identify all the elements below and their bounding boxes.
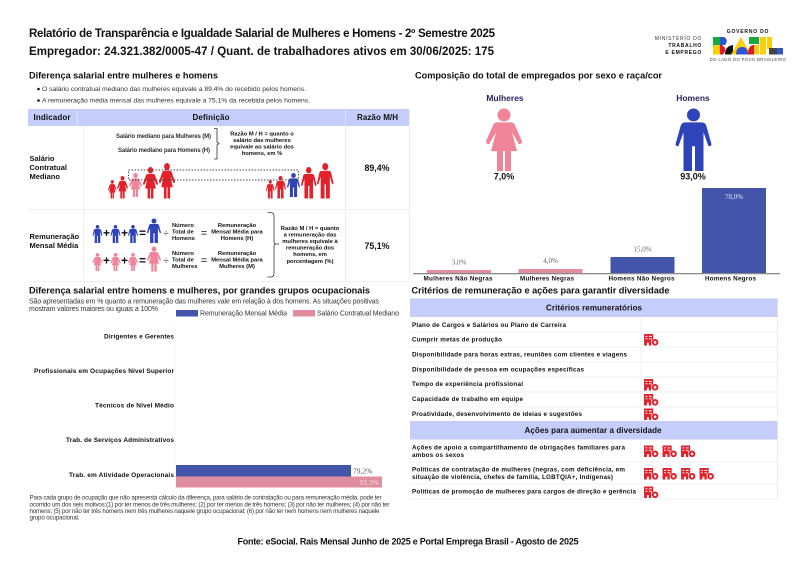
icon: women group <box>108 163 175 198</box>
icon: homens <box>676 93 712 182</box>
formula note: salário das mulheres <box>233 138 291 144</box>
bar chart: raça/cor: 15,0% <box>633 246 652 254</box>
formula: women: Mensal Média para <box>211 258 264 264</box>
row: salário contratual mediano: Salário <box>30 154 55 163</box>
formula note: mulheres equivale à <box>282 239 338 245</box>
logo: ministério: MINISTÉRIO DO <box>655 35 702 42</box>
formula: men: Total de <box>172 230 195 236</box>
formula note: homens, em <box>293 252 327 258</box>
icon: homens: 93,0% <box>680 172 706 182</box>
logo: ministério: TRABALHO <box>668 43 702 49</box>
formula note: Razão M / H = quanto o <box>230 132 294 138</box>
formula: women: + <box>121 254 128 268</box>
bracket <box>214 128 219 159</box>
table header: Definição <box>192 113 230 122</box>
category labels: Trab. em Atividade Operacionais <box>69 472 174 479</box>
logo: governo do Brasil <box>710 29 787 62</box>
formula: men: + <box>121 226 128 240</box>
description: São apresentadas em % quanto a remuneração das mulheres vale em relação à dos homens. As situações positivas <box>29 298 380 306</box>
row: remuneração mensal média: Mensal Média <box>30 241 79 250</box>
header: critérios remuneratórios: Critérios remuneratórios <box>546 304 643 312</box>
bar chart: raça/cor: Mulheres Não Negras <box>424 276 493 282</box>
panel: composição <box>413 70 780 282</box>
logo: ministério <box>655 35 702 56</box>
formula note: homens, em % <box>242 151 282 157</box>
row: salário contratual mediano <box>30 128 390 198</box>
legend <box>176 310 399 318</box>
icon: homens: Homens <box>676 93 710 103</box>
heading: diferença salarial: Diferença salarial entre mulheres e homens <box>29 70 218 80</box>
bar chart: raça/cor: 3,0% <box>452 258 466 266</box>
bar chart: ocupações: 79,2% <box>353 466 372 476</box>
bullet list <box>37 86 310 104</box>
value: 89,4%: 89,4% <box>365 163 390 173</box>
title <box>29 28 496 58</box>
criteria rows: Disponibilidade para horas extras, reuniões com clientes e viagens <box>412 352 627 358</box>
category labels: Profissionais em Ocupações Nível Superior <box>34 368 174 375</box>
actions rows: Políticas de promoção de mulheres para cargos de direção e gerência <box>412 488 636 496</box>
criteria rows: Proatividade, desenvolvimento de ideias e sugestões <box>412 411 582 418</box>
icon: mulheres: Mulheres <box>486 93 524 103</box>
category labels: Dirigentes e Gerentes <box>104 334 174 340</box>
formula: women: Número <box>172 251 194 257</box>
formula note: remuneração dos <box>286 246 334 252</box>
table header: Razão M/H <box>357 113 398 122</box>
row: salário contratual mediano: Mediano <box>30 172 60 181</box>
footnote: Para cada grupo de ocupação que não apresenta cálculo da diferença, para salário de contratação ou para remuneração média, pode ter <box>30 494 382 502</box>
icons: ações <box>644 446 713 498</box>
row: salário contratual mediano: Salário mediano para Mulheres (M) <box>116 134 211 140</box>
formula: women: Mulheres <box>172 264 197 270</box>
category labels <box>34 334 174 479</box>
criteria rows: Tempo de experiência profissional <box>412 381 523 388</box>
formula: men: Mensal Média para <box>211 230 264 236</box>
actions rows: Políticas de contratação de mulheres (negras, com deficiência, em <box>412 466 625 474</box>
bar chart: ocupações: 93,3% <box>360 478 379 487</box>
category labels: Trab. de Serviços Administrativos <box>66 437 174 444</box>
criteria rows: Cumprir metas de produção <box>412 336 502 344</box>
bar chart: raça/cor: Homens Não Negros <box>608 276 675 282</box>
formula: women: Total de <box>172 258 195 264</box>
actions rows: situação de violência, chefes de família, LGBTQIA+, Indígenas) <box>412 474 613 481</box>
formula: men: + <box>103 226 110 240</box>
actions rows: Ações de apoio a compartilhamento de obrigações familiares para <box>412 444 625 452</box>
icon: mulheres <box>486 93 524 182</box>
formula: women: + <box>103 254 110 268</box>
bar chart: raça/cor <box>413 188 780 282</box>
bar chart: raça/cor: 78,0% <box>725 193 743 201</box>
formula: men: Homens <box>172 236 195 242</box>
formula: men: Número <box>172 223 194 229</box>
criteria rows <box>412 322 627 418</box>
formula: men <box>92 218 264 243</box>
footnote: homens; (5) por não ter três homens nem três mulheres naquele grupo ocupacional; (6) por não ter nem homens nem mulheres naquele <box>30 508 380 515</box>
heading: composição: Composição do total de empregados por sexo e raça/cor <box>415 70 662 80</box>
formula: men: ÷ <box>163 228 169 240</box>
formula: women: = <box>139 254 146 268</box>
icon: mulheres: 7,0% <box>494 172 514 182</box>
formula: women <box>92 246 264 272</box>
formula: women: Mulheres (M) <box>219 264 255 270</box>
heading: critérios: Critérios de remuneração e ações para garantir diversidade <box>412 286 670 296</box>
footnote: ocorrido um dos seis motivos:(1) por ter menos de três mulheres; (2) por ter menos de três homens; (3) por não ter mulheres; (4) por não ter <box>30 502 389 508</box>
bar chart: ocupações <box>176 325 382 490</box>
header: ações: Ações para aumentar a diversidade <box>524 426 662 435</box>
formula note: equivale ao salário dos <box>230 144 294 150</box>
footnote <box>30 494 389 522</box>
formula note: porcentagem (%) <box>286 259 334 265</box>
actions rows <box>412 444 636 496</box>
bullet list: A remuneração média mensal das mulheres equivale a 75,1% da recebida pelos homens. <box>42 98 310 104</box>
panel: critérios <box>410 286 778 500</box>
category labels: Técnicos de Nível Médio <box>95 402 174 410</box>
icon: men group <box>266 163 334 198</box>
criteria rows: Disponibilidade de pessoa em ocupações específicas <box>412 366 584 374</box>
logo: governo do Brasil: GOVERNO DO <box>727 29 769 35</box>
panel: diferença salarial <box>28 70 410 282</box>
formula note <box>230 132 294 157</box>
formula: men: Remuneração <box>218 223 257 229</box>
formula: men: = <box>139 226 146 240</box>
table header: Indicador <box>34 113 70 122</box>
logo: governo do Brasil: DO LADO DO POVO BRASILEIRO <box>710 57 787 62</box>
criteria rows: Plano de Cargos e Salários ou Plano de Carreira <box>412 322 566 329</box>
title: Empregador: 24.321.382/0005-47 / Quant. de trabalhadores ativos em 30/06/2025: 175 <box>29 46 495 58</box>
header: ações <box>410 421 778 440</box>
criteria rows: Capacidade de trabalho em equipe <box>412 396 523 403</box>
formula: men: Homens (H) <box>221 236 253 242</box>
formula note: a remuneração das <box>284 232 336 238</box>
title: Relatório de Transparência e Igualdade Salarial de Mulheres e Homens - 2º Semestre 2025 <box>29 28 496 40</box>
bar chart: raça/cor: Homens Negros <box>705 276 756 282</box>
description <box>29 298 380 313</box>
source note: Fonte: eSocial. Rais Mensal Junho de 2025 e Portal Emprega Brasil - Agosto de 2025 <box>238 536 578 546</box>
row: salário contratual mediano: Salário mediano para Homens (H) <box>118 148 210 154</box>
panel: grupos ocupacionais <box>29 286 399 522</box>
value: 75,1%: 75,1% <box>365 241 390 251</box>
legend: Remuneração Mensal Média <box>200 310 287 318</box>
formula: women: = <box>201 255 207 267</box>
formula note: Razão M / H = quanto <box>281 226 340 232</box>
footnote: grupo ocupacional. <box>30 514 80 522</box>
table header <box>28 109 409 126</box>
row: remuneração mensal média <box>30 212 390 277</box>
header: critérios remuneratórios <box>410 298 778 317</box>
description: mostram valores maiores ou iguais a 100% <box>29 306 158 313</box>
bar chart: raça/cor: Mulheres Negras <box>520 276 574 282</box>
bracket <box>268 212 279 277</box>
bar chart: raça/cor: 4,0% <box>543 257 558 265</box>
actions rows: ambos os sexos <box>412 452 464 459</box>
formula: women: Remuneração <box>218 251 257 257</box>
row: remuneração mensal média: Remuneração <box>30 232 80 241</box>
heading: grupos ocupacionais: Diferença salarial entre homens e mulheres, por grandes grupos ocupacionais <box>29 286 370 296</box>
formula: men: = <box>201 228 207 240</box>
legend: Salário Contratual Mediano <box>317 310 399 318</box>
median highlight <box>128 170 298 180</box>
logo: ministério: E EMPREGO <box>665 50 702 56</box>
formula: women: ÷ <box>163 256 169 267</box>
bullet list: O salário contratual mediano das mulheres equivale a 89,4% do recebido pelos homens. <box>42 86 306 93</box>
formula note <box>281 226 340 265</box>
row: salário contratual mediano: Contratual <box>30 163 67 172</box>
icons: critérios <box>644 334 657 420</box>
